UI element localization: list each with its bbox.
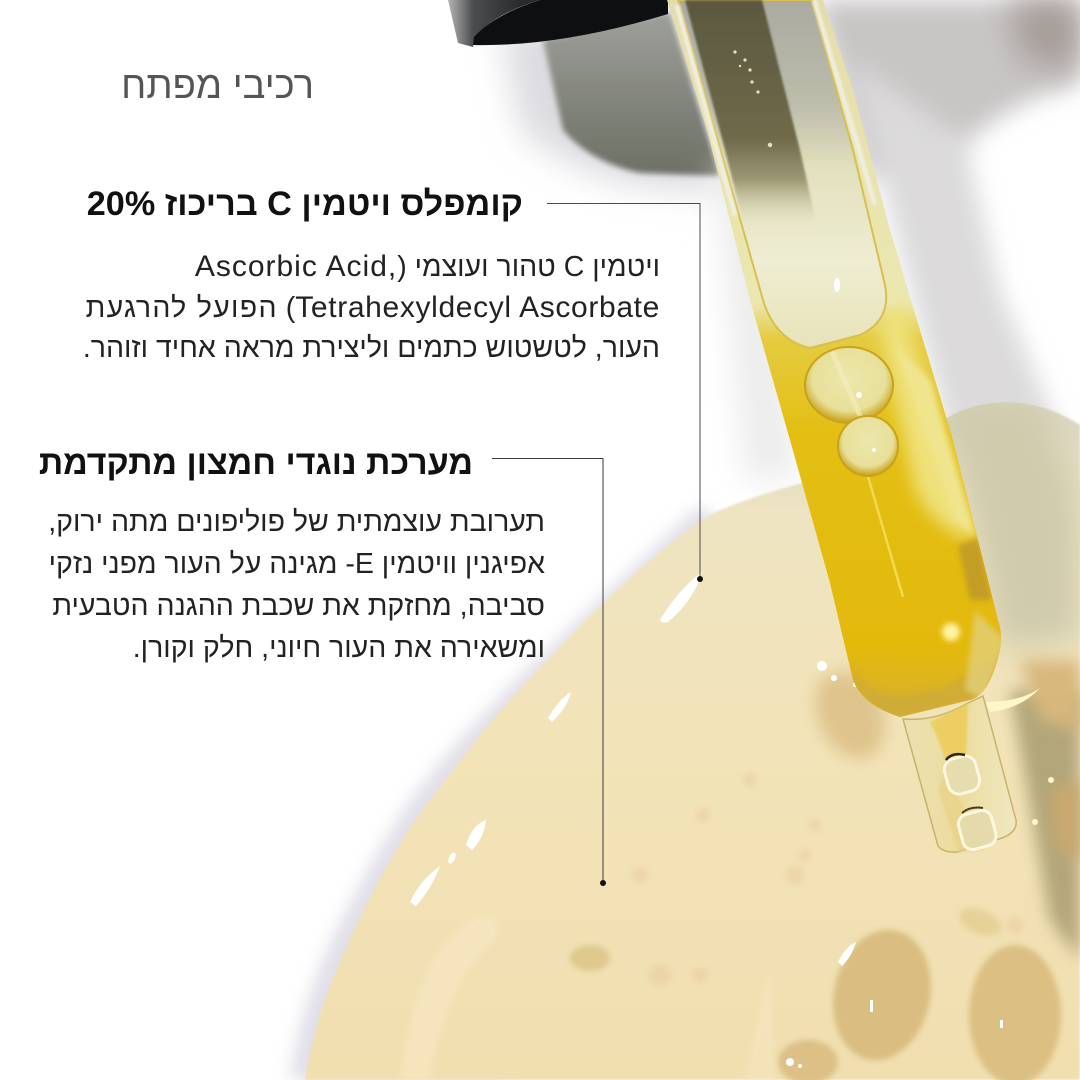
dropper: dark residue band <box>685 0 818 230</box>
heading: antioxidant system: מערכת נוגדי חמצון מתקדמת <box>39 444 473 482</box>
body: antioxidant system: סביבה, מחזקת את שכבת ההגנה הטבעית <box>52 590 545 622</box>
dropper: glowing spot <box>942 623 960 641</box>
gel halo shadow <box>290 505 760 1080</box>
heading: vitamin C complex: קומפלס ויטמין C בריכוז 20% <box>87 185 523 223</box>
body: antioxidant system: תערובת עוצמתית של פוליפונים מתה ירוק, <box>48 506 545 538</box>
product photo: dropper over gel <box>287 0 1080 1080</box>
body: antioxidant system: אפיגנין וויטמין E- מגינה על העור מפני נזקי <box>49 548 545 580</box>
body: vitamin C complex: Tetrahexyldecyl Ascorbate) הפועל להרגעת <box>86 290 660 324</box>
dropper: large bubble <box>805 347 893 423</box>
dropper: sparkles <box>733 50 840 292</box>
dropper: brown residue <box>958 538 992 600</box>
cap: grey rim <box>448 0 540 47</box>
gel: highlights <box>410 572 1054 1068</box>
dropper: inner tube <box>678 0 886 348</box>
title: רכיבי מפתח <box>121 64 314 107</box>
connector: vitamin C callout <box>547 203 703 582</box>
dropper: shoulder <box>852 672 974 716</box>
dropper: small bubble <box>838 416 898 476</box>
dropper: centre light line <box>867 473 903 597</box>
body: vitamin C complex: העור, לטשטוש כתמים וליצירת מראה אחיד וזוהר. <box>83 332 660 364</box>
dropper: pale right band <box>880 300 975 542</box>
connector: antioxidant callout <box>492 458 606 886</box>
tip: upper bubble <box>942 753 982 797</box>
bottle cap <box>448 0 668 47</box>
gel: tip shadow <box>808 665 892 764</box>
gel pool <box>305 395 1080 1080</box>
body: antioxidant system: ומשאירה את העור חיוני, חלק וקורן. <box>133 632 545 664</box>
text block: vitamin C complex <box>83 185 660 364</box>
cap: black body <box>473 0 668 45</box>
dropper: outer glass <box>667 0 1001 717</box>
gel: oil drops <box>830 927 934 1063</box>
tip: lower bubble <box>956 808 998 852</box>
dropper: glass light edges <box>677 0 875 215</box>
body: antioxidant system <box>48 506 545 664</box>
dropper tip <box>903 696 1016 852</box>
gel: freckles <box>632 773 1023 986</box>
text block: antioxidant system <box>39 444 545 664</box>
shadow: cap on surface <box>500 5 730 191</box>
gel: pale ridges <box>400 917 498 1080</box>
body: vitamin C complex <box>83 250 660 364</box>
glass dropper <box>667 0 1005 717</box>
shadow: dropper on surface <box>715 0 1080 560</box>
body: vitamin C complex: ויטמין C טהור ועוצמי (Ascorbic Acid,‎ <box>195 250 660 283</box>
gel: shadow of dropper <box>946 402 1080 656</box>
